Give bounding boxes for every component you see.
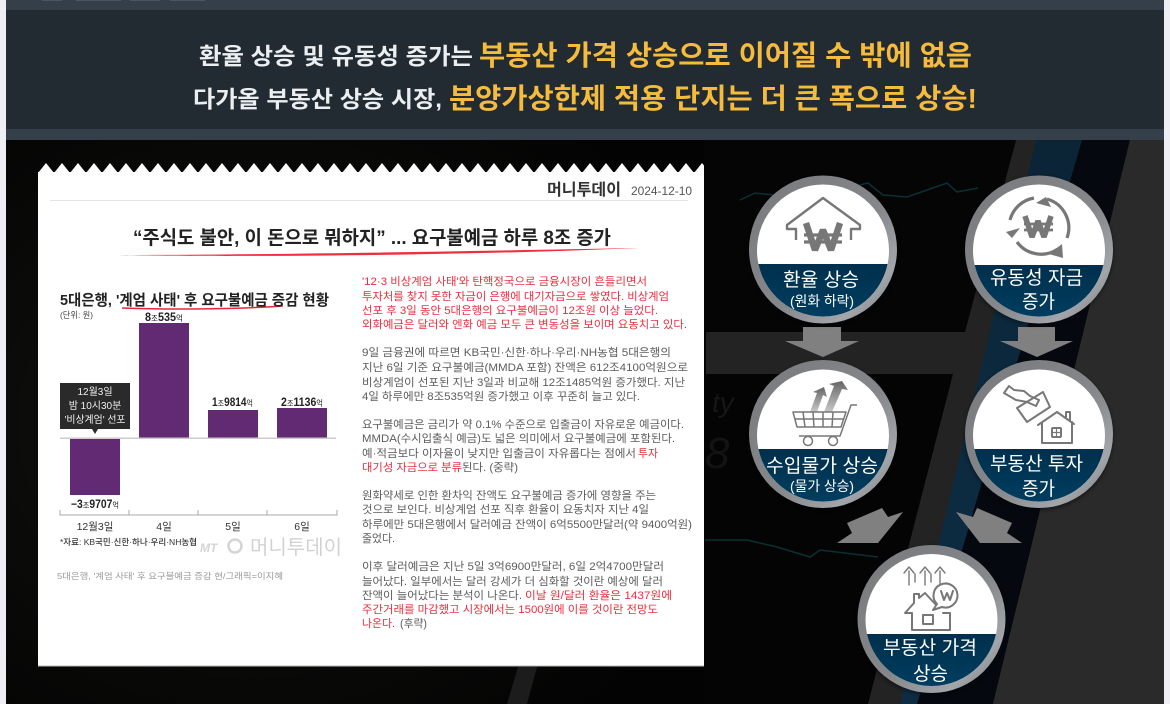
callout: martial law declared: '비상계엄' 선포: [64, 414, 126, 426]
circle: liquidity increase: [965, 176, 1113, 325]
headline line 2: 다가올 부동산 상승 시장,: [193, 86, 442, 112]
value labels: 1조9814억: [212, 397, 253, 409]
paragraph 4: 줄었다.: [362, 532, 395, 545]
paragraph 5: [362, 559, 672, 630]
arrow: liquidity to real estate investment: [1000, 327, 1073, 357]
dark background with diagonal bands: ty: [712, 387, 736, 418]
circle: real estate investment increase: 증가: [1022, 478, 1055, 500]
circle: real estate price rise: [858, 545, 1006, 695]
watermark: 머니투데이: [250, 536, 342, 559]
arrow: investment to real estate prices: [956, 508, 1022, 543]
paragraph 3: 된다. (중략): [462, 461, 518, 474]
paragraph 1 highlighted: 선포 후 3일 동안 5대은행의 요구불예금이 12조원 이상 늘었다.: [362, 303, 658, 317]
headline line 1: 부동산 가격 상승으로 이어질 수 밖에 없음: [479, 40, 972, 71]
circle: exchange rate rise: 환율 상승: [783, 269, 859, 291]
icon: house with rising arrows and won bubble: [904, 567, 957, 630]
paragraph 4: 하루에만 5대은행에서 달러예금 잔액이 6억5500만달러(약 9400억원): [362, 517, 692, 531]
x axis: 12월3일: [77, 520, 113, 533]
article body text: [362, 275, 692, 630]
paragraph 3: 대기성 자금으로 분류: [362, 461, 462, 474]
bar chart: demand deposit change: [57, 292, 342, 581]
article headline: [119, 227, 639, 256]
dark background with diagonal bands: 8: [705, 429, 730, 478]
headline line 2: [193, 83, 977, 114]
paragraph 1 highlighted: 투자처를 찾지 못한 자금이 은행에 대기자금으로 쌓였다. 비상계엄: [362, 290, 669, 303]
icon: house with won: [787, 198, 860, 250]
paragraph 5: (후략): [400, 617, 427, 630]
headline line 1: [199, 40, 972, 71]
news source and date: [50, 181, 692, 201]
circle: liquidity increase: 유동성 자금: [990, 267, 1083, 289]
paragraph 5: 주간거래를 마감했고 시장에서는 1500원에 이를 것이란 전망도: [362, 603, 658, 616]
value labels: [71, 312, 323, 511]
chart title: 5대은행, '계엄 사태' 후 요구불예금 증감 현황: [60, 292, 329, 309]
panel: news clipping: [38, 163, 704, 666]
paragraph 4: 것으로 보인다. 비상계엄 선포 직후 환율이 요동치자 지난 4일: [362, 502, 649, 516]
paragraph 2: [362, 345, 688, 403]
circle: import price rise: (물가 상승): [790, 478, 854, 494]
paragraph 2: 비상계엄이 선포된 지난 3일과 비교해 12조1485억원 증가했다. 지난: [362, 375, 685, 389]
paragraph 1 highlighted: '12·3 비상계엄 사태'와 탄핵정국으로 금융시장이 흔들리면서: [362, 275, 647, 288]
paragraph 5: 나온다.: [362, 617, 395, 630]
x axis: 6일: [294, 520, 310, 533]
paragraph 5: 이후 달러예금은 지난 5일 3억6900만달러, 6일 2억4700만달러: [362, 559, 664, 573]
watermark: [200, 536, 342, 559]
headline line 2: 분양가상한제 적용 단지는 더 큰 폭으로 상승!: [449, 83, 977, 114]
chart unit: (단위: 원): [60, 310, 93, 320]
circle: real estate investment increase: [965, 360, 1113, 510]
news source and date: 머니투데이: [547, 181, 621, 199]
value labels: 2조1136억: [281, 397, 323, 409]
paragraph 2: 지난 6일 기준 요구불예금(MMDA 포함) 잔액은 612조4100억원으로: [362, 360, 688, 374]
news source and date: 2024-12-10: [631, 184, 692, 198]
paragraph 3: 투자: [638, 447, 658, 460]
icon: shopping cart with rising arrows: [793, 381, 857, 446]
circle: real estate investment increase: 부동산 투자: [990, 453, 1083, 475]
chart caption: 5대은행, '계엄 사태' 후 요구불예금 증감 현/그래픽=이지혜: [57, 571, 283, 581]
chart source: *자료: KB국민·신한·하나·우리·NH농협: [60, 537, 197, 547]
paragraph 3: MMDA(수시입출식 예금)도 넓은 의미에서 요구불예금에 포함된다.: [362, 432, 675, 445]
circle: real estate price rise: 부동산 가격: [883, 637, 977, 659]
circle: import price rise: 수입물가 상승: [766, 455, 878, 477]
circle: exchange rate rise: (원화 하락): [790, 293, 854, 309]
value labels: −3조9707억: [71, 499, 119, 511]
paragraph 5: 이날 원/달러 환율은 1437원에: [525, 589, 672, 602]
icon: hand investing money in house: [1004, 386, 1074, 443]
paragraph 3: 요구불예금은 금리가 약 0.1% 수준으로 입출금이 자유로운 예금이다.: [362, 417, 684, 431]
dark background with diagonal bands: [6, 140, 1164, 704]
arrow: exchange rate to import prices: [785, 327, 859, 357]
value labels: 8조535억: [145, 312, 183, 324]
circle: exchange rate rise: [749, 176, 897, 325]
icon: circular won arrows: [1006, 197, 1069, 258]
paragraph 5: 늘어났다. 일부에서는 달러 강세가 더 심화할 것이란 예상에 달러: [362, 574, 663, 588]
paragraph 2: 9일 금융권에 따르면 KB국민·신한·하나·우리·NH농협 5대은행의: [362, 345, 671, 359]
paragraph 3: 예·적금보다 이자율이 낮지만 입출금이 자유롭다는 점에서: [362, 447, 636, 460]
paragraph 4: 원화약세로 인한 환차익 잔액도 요구불예금 증가에 영향을 주는: [362, 488, 656, 502]
x axis: 5일: [225, 520, 241, 533]
paragraph 2: 4일 하루에만 8조535억원 증가했고 이후 꾸준히 늘고 있다.: [362, 389, 640, 403]
circle: real estate price rise: 상승: [913, 663, 948, 685]
header banner: [6, 0, 1164, 140]
callout: martial law declared: 밤 10시30분: [69, 400, 121, 412]
x axis: 4일: [156, 520, 172, 533]
paragraph 5: 잔액이 늘어났다는 분석이 나온다.: [362, 589, 522, 602]
circle: liquidity increase: 증가: [1022, 291, 1055, 313]
x axis: [60, 510, 337, 533]
circle: import price rise: [749, 360, 897, 510]
watermark: MT: [200, 541, 219, 555]
paragraph 1 highlighted: [362, 275, 687, 331]
bars: [70, 323, 327, 495]
headline line 1: 환율 상승 및 유동성 증가는: [199, 43, 473, 69]
callout: martial law declared: 12월3일: [77, 386, 113, 398]
callout: martial law declared: [60, 383, 130, 434]
paragraph 3: [362, 417, 684, 474]
paragraph 1 highlighted: 외화예금은 달러와 엔화 예금 모두 큰 변동성을 보이며 요동치고 있다.: [362, 318, 687, 331]
paragraph 4: [362, 488, 692, 545]
article headline: “주식도 불안, 이 돈으로 뭐하지” ... 요구불예금 하루 8조 증가: [133, 227, 611, 249]
arrow: import prices to real estate prices: [837, 508, 903, 543]
